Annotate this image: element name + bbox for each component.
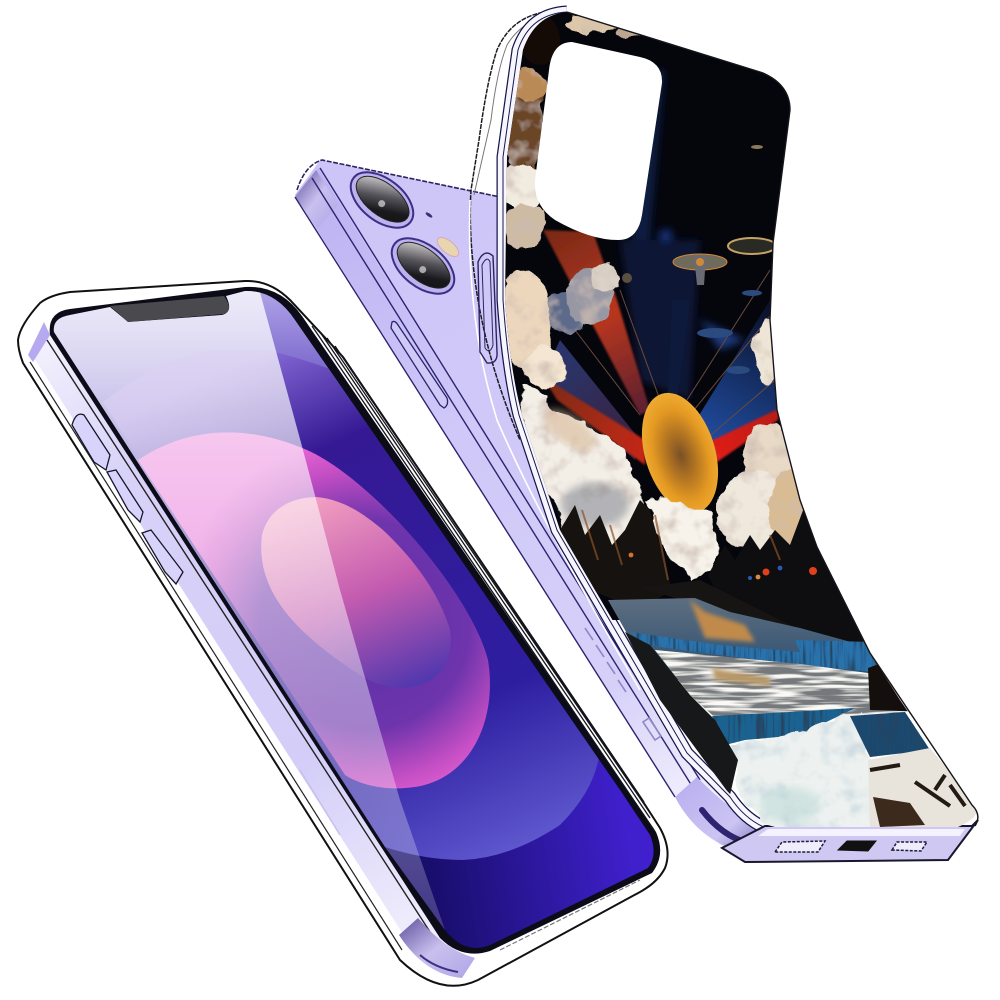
top edge (297, 160, 505, 198)
left speaker holes (775, 841, 825, 852)
thin white highlight (470, 200, 640, 690)
wall white fill (503, 12, 775, 831)
blue-grey cloud (541, 264, 620, 334)
dark right boulder (868, 664, 908, 712)
upper left clouds (498, 16, 642, 247)
fine ray lines (575, 270, 775, 440)
white highlight strip (758, 829, 965, 836)
right speaker holes (892, 842, 927, 851)
camera 1 (341, 161, 423, 239)
night sky (505, 12, 790, 620)
rail lines (295, 168, 700, 797)
mid white rapids (655, 650, 905, 722)
small right edge cloud (750, 318, 774, 386)
lilac back panel (295, 160, 770, 860)
pink disc (138, 432, 490, 788)
base gradient (40, 280, 680, 960)
blue nebula streaks (620, 70, 745, 400)
tan shading in the big cloud (542, 404, 598, 454)
grey shading in the big cloud (561, 483, 629, 527)
lower blue falls (712, 708, 855, 745)
case bottom edge with ports (722, 820, 978, 862)
left cloud column (499, 270, 565, 390)
camera 2 (382, 227, 464, 305)
charging port (838, 841, 876, 851)
case wall beside the artwork (503, 12, 775, 831)
screen wallpaper (40, 280, 680, 960)
dark branches (870, 765, 965, 806)
left inner stripe (47, 340, 432, 935)
dark forest left (560, 500, 670, 600)
upper blue waterfalls (630, 632, 875, 672)
glowing orange sphere (642, 392, 718, 510)
dark forest right (708, 510, 864, 642)
large outer disc (103, 350, 600, 860)
red rays (543, 230, 780, 465)
lower edge marks (500, 880, 640, 950)
top left corner accent (28, 322, 50, 362)
camera cutout (535, 42, 662, 240)
bottom corner speaker line (420, 955, 458, 972)
dark rocks above river (664, 580, 790, 626)
outer edge (470, 11, 567, 440)
front phone in clear case (18, 280, 680, 986)
right lower clouds (717, 425, 812, 550)
wall dark lines (503, 12, 775, 831)
lilac frame band (34, 330, 445, 945)
orange reflection (690, 600, 755, 642)
inner disc (261, 497, 451, 688)
dark hair of cloud top corner (520, 15, 560, 65)
right edge stripes (312, 326, 654, 830)
snowy right bank (868, 748, 976, 827)
dark upper corner of the rail (295, 170, 338, 228)
black bezel (50, 287, 660, 954)
inner edge (474, 12, 567, 195)
spaceship 2 (728, 238, 776, 254)
big white cloud mass (520, 384, 644, 545)
white foam (735, 712, 875, 830)
outer case (18, 281, 668, 986)
central white cloud (645, 499, 717, 580)
tree trunks with orange glow (582, 510, 780, 580)
bottom left corner (399, 918, 475, 978)
power slot (391, 321, 448, 408)
side button cover (478, 253, 497, 363)
side rail (295, 168, 697, 797)
transparent case outline (470, 11, 640, 690)
right rock with falls (850, 712, 930, 757)
distant ships (622, 145, 763, 374)
forest lights (629, 553, 817, 580)
back phone: lilac body seen through the case (295, 160, 770, 860)
pale green foam shading (760, 787, 820, 823)
dark brown boulder (873, 797, 925, 827)
microphone (425, 211, 433, 219)
phone left edge line (300, 770, 340, 835)
river (608, 598, 890, 680)
notch (110, 296, 229, 322)
orange glow in rapids (712, 668, 770, 686)
spaceship 1 (673, 254, 727, 285)
flash (434, 234, 462, 260)
volume and mute buttons (72, 414, 183, 584)
glass film glare (40, 280, 445, 960)
fan of blue and dark rays (543, 300, 777, 460)
speaker slot (702, 810, 748, 843)
left edge stripe (30, 362, 402, 950)
bottom frame (722, 820, 978, 862)
left dark rocks (625, 632, 738, 795)
printed case artwork (498, 0, 1000, 830)
lower right blue glow (380, 700, 680, 960)
laser marks on the rail (585, 628, 661, 740)
bottom corner of the body (675, 777, 770, 856)
wall inner line (503, 12, 775, 831)
artwork outline (567, 12, 978, 826)
